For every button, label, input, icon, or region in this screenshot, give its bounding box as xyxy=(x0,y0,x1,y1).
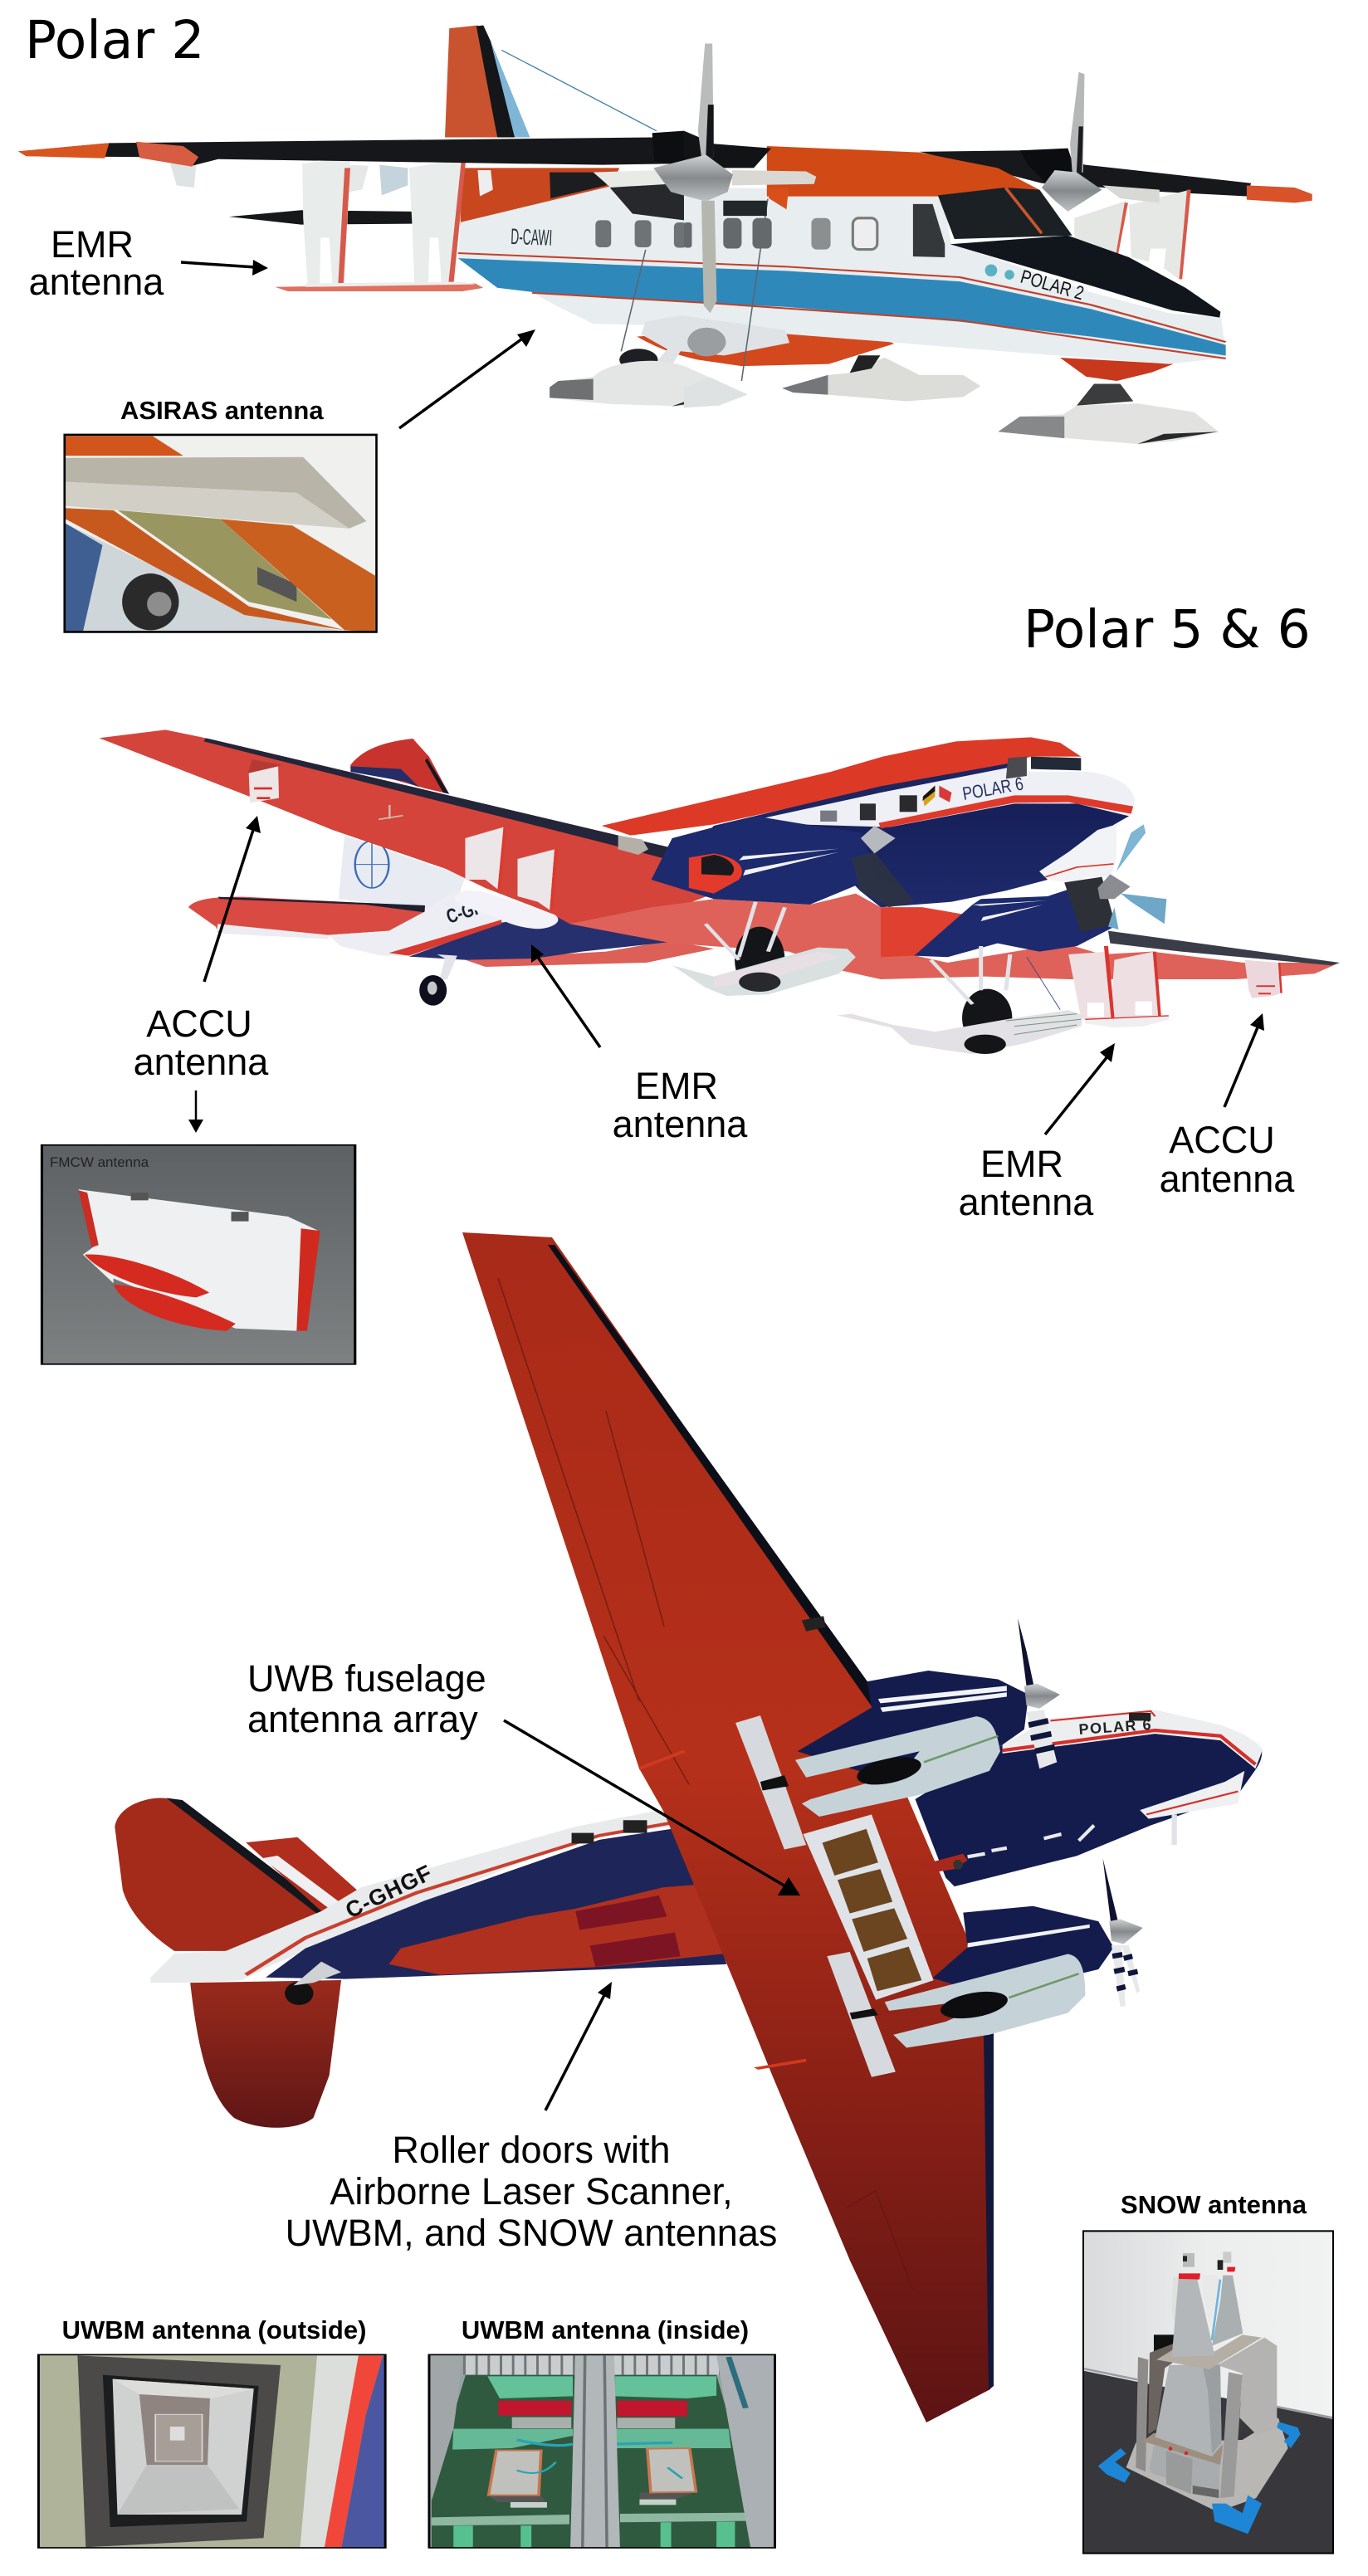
label: EMR antenna (Polar 2) xyxy=(29,223,164,303)
wing xyxy=(462,1232,990,2422)
aircraft lettering: POLAR 6 xyxy=(961,773,1025,804)
photo inset: UWBM inside xyxy=(429,2354,775,2548)
arrow: UWB array xyxy=(504,1720,800,1895)
photo: Polar 5 or 6 from below: POLAR 6 xyxy=(1078,1716,1153,1738)
photo inset: SNOW antenna xyxy=(1083,2231,1333,2554)
photo: Polar 5 or 6 from below xyxy=(115,1232,1262,2422)
caption: FMCW antenna: FMCW antenna xyxy=(50,1154,149,1170)
label: EMR antenna right: EMR xyxy=(980,1143,1063,1185)
label: EMR antenna (Polar 2): EMR xyxy=(51,223,134,266)
photo inset: FMCW antenna xyxy=(42,1145,355,1364)
label: ACCU antenna right: ACCU xyxy=(1169,1119,1275,1161)
arrow: EMR antenna centre xyxy=(531,944,600,1047)
fuselage xyxy=(458,146,1226,407)
label: EMR antenna centre xyxy=(613,1065,748,1145)
photo inset: UWBM outside xyxy=(38,2354,385,2548)
label: EMR antenna (Polar 2): antenna xyxy=(29,261,164,303)
label: roller doors: Roller doors with xyxy=(392,2129,671,2171)
label: UWB fuselage antenna array: antenna array xyxy=(247,1698,478,1740)
arrow: ACCU antenna left xyxy=(204,816,261,982)
fuselage, engines, gear and skis xyxy=(569,737,1340,1054)
label: ACCU antenna left xyxy=(134,1003,269,1083)
photo inset: ASIRAS antenna xyxy=(65,435,377,632)
nacelles, nose and skis xyxy=(735,1616,1262,2077)
label: roller doors xyxy=(286,2129,777,2254)
aircraft lettering: C-GHGF xyxy=(341,1860,437,1923)
label: ACCU antenna left: antenna xyxy=(134,1041,269,1083)
label: EMR antenna centre: EMR xyxy=(635,1065,718,1107)
tail, rear fuselage and near wing xyxy=(188,739,714,1006)
aircraft lettering: D-CAWI xyxy=(511,224,553,251)
arrow: ASIRAS antenna xyxy=(399,329,535,428)
photo: Polar 2 aircraft xyxy=(18,25,1312,444)
front of fuselage xyxy=(684,188,1220,444)
label: EMR antenna right xyxy=(959,1143,1094,1223)
label: UWB fuselage antenna array: UWB fuselage xyxy=(247,1657,486,1700)
arrow: EMR antenna Polar 2 xyxy=(181,260,268,276)
photo: Polar 2 aircraft: POLAR 2 xyxy=(1019,266,1087,304)
label: UWB fuselage antenna array xyxy=(247,1657,486,1740)
photo: Polar 6 aircraft side view xyxy=(99,729,1340,1054)
title: Polar 5 & 6: Polar 5 & 6 xyxy=(1024,599,1311,660)
label: ACCU antenna right: antenna xyxy=(1160,1158,1295,1200)
arrow: roller doors xyxy=(545,1982,612,2110)
label: EMR antenna right: antenna xyxy=(959,1181,1094,1223)
label: UWBM antenna inside: UWBM antenna (inside) xyxy=(462,2315,749,2344)
rear cabin windows xyxy=(595,220,687,247)
near propeller xyxy=(594,131,684,220)
far wing and engine xyxy=(920,72,1312,279)
label: ACCU antenna right xyxy=(1160,1119,1295,1200)
label: UWBM antenna outside: UWBM antenna (outside) xyxy=(62,2315,366,2344)
arrow: down to FMCW inset xyxy=(188,1090,203,1133)
aircraft lettering: C-GH xyxy=(444,895,487,929)
arrow: EMR antenna right xyxy=(1045,1043,1115,1134)
label: ASIRAS antenna: ASIRAS antenna xyxy=(120,396,324,425)
label: roller doors: Airborne Laser Scanner, xyxy=(330,2170,733,2213)
label: SNOW antenna: SNOW antenna xyxy=(1121,2190,1307,2219)
title: Polar 2: Polar 2 xyxy=(25,10,204,71)
label: EMR antenna centre: antenna xyxy=(613,1103,748,1145)
label: ACCU antenna left: ACCU xyxy=(146,1003,252,1045)
label: roller doors: UWBM, and SNOW antennas xyxy=(286,2212,777,2254)
arrow: ACCU antenna right xyxy=(1224,1013,1264,1107)
